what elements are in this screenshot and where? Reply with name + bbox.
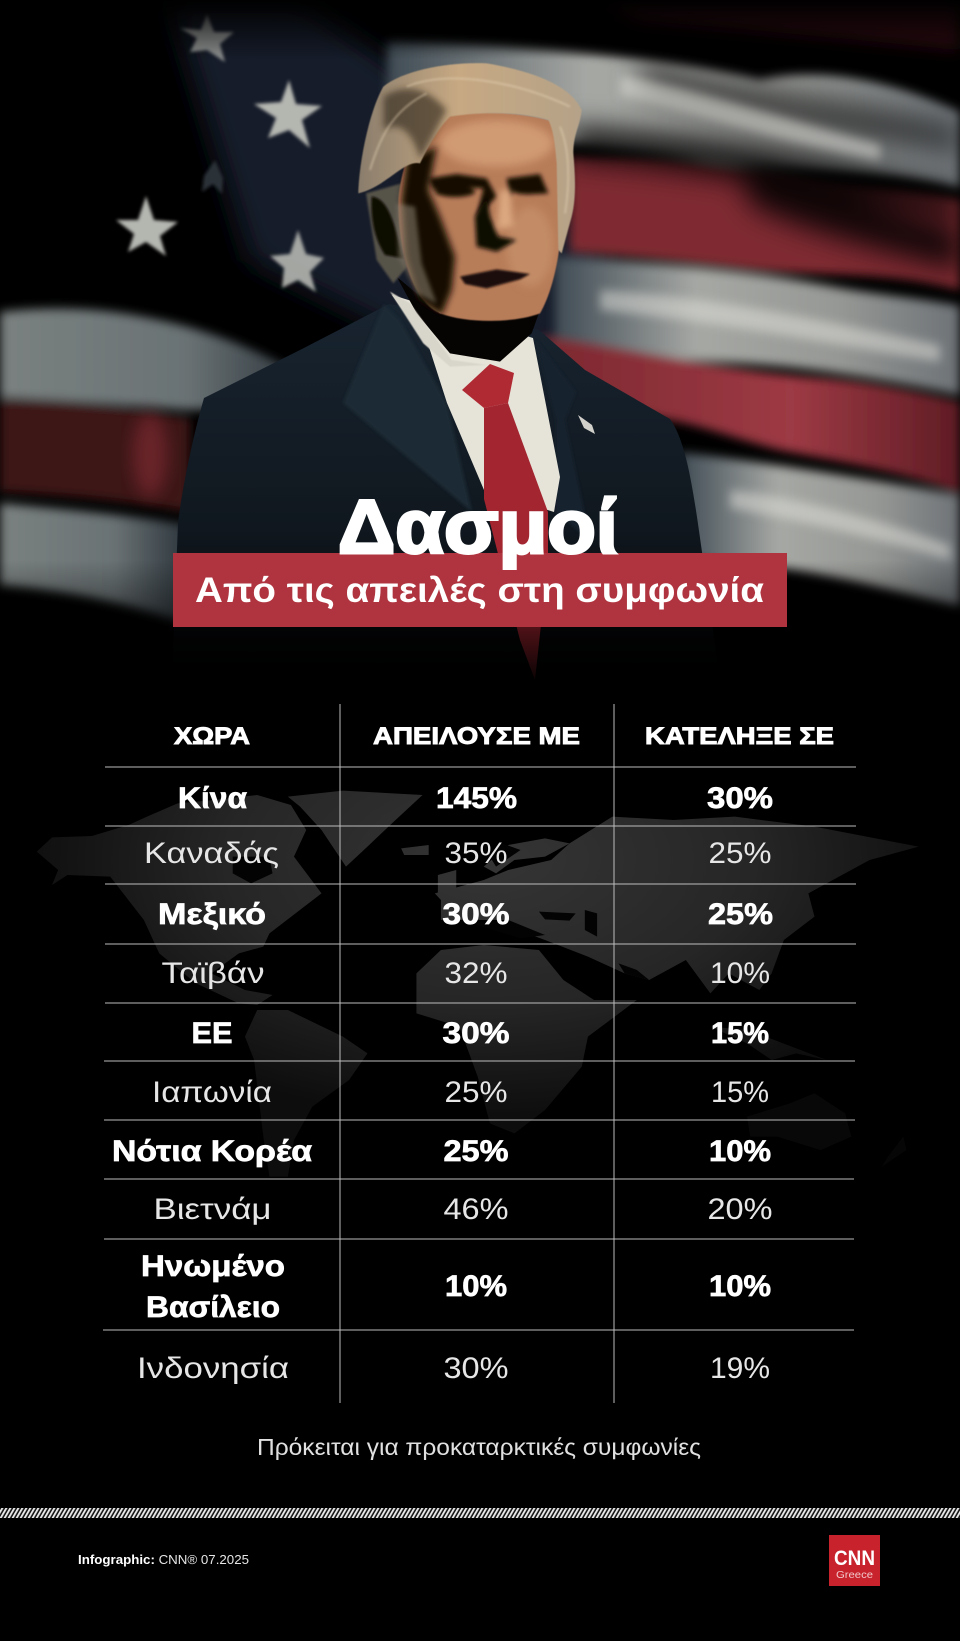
row: Νότια Κορέα [112,1135,771,1168]
forehead light [440,120,553,167]
row: Νότια Κορέα: 25% [444,1135,508,1168]
row: Μεξικό: 30% [442,898,510,931]
row: Ινδονησία: 30% [444,1352,508,1385]
row: Βιετνάμ: 20% [708,1193,772,1226]
shirt [392,295,560,512]
row: Μεξικό: Μεξικό [158,898,266,931]
footnote: Πρόκειται για προκαταρκτικές συμφωνίες [257,1434,701,1460]
banner background [173,553,787,627]
face base [398,113,561,321]
hair sides [366,183,410,283]
indonesia [710,1027,827,1060]
table grid lines [103,704,856,1403]
row: Ηνωμένο Βασίλειο: 10% [709,1270,771,1303]
logo background [829,1535,880,1586]
row: Ηνωμένο Βασίλειο: 10% [445,1270,507,1303]
hero image: flag background [0,0,960,625]
row: Ταϊβάν: Ταϊβάν [162,957,264,990]
row: Ταϊβάν: 32% [444,957,508,990]
neck shadow [397,277,540,362]
inland seas and bays [233,843,649,980]
row: Ινδονησία: 19% [710,1352,770,1385]
hatched divider [0,1508,960,1518]
north america [37,795,322,1005]
row: Κίνα: Κίνα [178,782,248,815]
hair strands [370,79,570,213]
header row: ΑΠΕΙΛΟΥΣΕ ΜΕ [373,723,580,750]
flag canton [170,0,610,370]
top red band [600,0,960,50]
row: Μεξικό [158,898,773,931]
grey side strip [397,203,437,303]
bottom fade of hero image [0,560,960,690]
subtitle text: Από τις απειλές στη συμφωνία [195,571,765,610]
ear shadow [371,197,403,258]
hair [358,63,582,253]
tie [462,364,548,680]
row: Κίνα: 30% [707,782,773,815]
eurasia [435,817,919,993]
nose shadow [475,197,517,252]
row: Ινδονησία: Ινδονησία [137,1352,289,1385]
greenland [288,791,423,867]
flag dark folds right [570,60,960,270]
scandinavia [484,838,570,873]
flag pin [578,415,595,434]
row: Ταϊβάν: 10% [710,957,770,990]
header row: ΧΩΡΑ [174,723,250,750]
row: Ταϊβάν [162,957,770,990]
row: Νότια Κορέα: Νότια Κορέα [112,1135,313,1168]
brows and eye sockets [428,174,548,217]
row: ΕΕ: 15% [711,1017,769,1050]
logo region name: Greece [836,1569,873,1581]
new zealand [882,1137,906,1167]
header row [174,723,834,750]
head [358,63,582,367]
world map background [37,791,919,1177]
row: Ιαπωνία: 25% [444,1076,508,1109]
australia [747,1093,851,1150]
nose highlight [497,190,513,230]
red fold on left stripe [132,413,168,497]
row: Ινδονησία [137,1352,770,1385]
africa [416,945,637,1133]
suit [172,304,720,680]
flag stars [116,14,324,292]
logo wordmark: CNN [834,1547,875,1570]
row: Ηνωμένο Βασίλειο: Βασίλειο [146,1291,280,1324]
subtitle banner [173,553,787,627]
shirt collar left [390,292,487,367]
row: Βιετνάμ: 46% [444,1193,508,1226]
mouth [460,269,530,288]
row: Βιετνάμ [154,1193,772,1226]
row: Κίνα [178,782,773,815]
uk and iceland [401,845,456,895]
title: Δασμοί [338,485,618,570]
row: Κίνα: 145% [436,782,517,815]
row: Βιετνάμ: Βιετνάμ [154,1193,272,1226]
top darkening [0,0,960,60]
south america [245,1010,367,1177]
row: Ηνωμένο Βασίλειο [141,1250,771,1324]
row: Καναδάς: Καναδάς [144,837,279,870]
flag highlight streaks right [600,75,950,560]
row: Ηνωμένο Βασίλειο: Ηνωμένο [141,1250,285,1283]
row: ΕΕ: 30% [442,1017,510,1050]
row: ΕΕ: ΕΕ [192,1017,232,1050]
portrait figure [172,63,720,680]
row: ΕΕ [192,1017,769,1050]
row: Ιαπωνία: Ιαπωνία [152,1076,272,1109]
row: Καναδάς: 35% [444,837,508,870]
hair shadow [383,89,447,160]
credit line: Infographic: CNN® 07.2025 [78,1553,249,1567]
left lapel [343,304,472,512]
row: Ιαπωνία: 15% [711,1076,769,1109]
row: Μεξικό: 25% [708,898,773,931]
flag stripes right [387,42,960,606]
header row: ΚΑΤΕΛΗΞΕ ΣΕ [645,723,834,750]
row: Καναδάς: 25% [708,837,772,870]
row: Καναδάς [144,837,772,870]
row: Ιαπωνία [152,1076,769,1109]
row: Νότια Κορέα: 10% [709,1135,771,1168]
cheek light [507,207,553,287]
table [103,704,856,1403]
flag stripes left [0,309,310,625]
logo: CNN Greece [829,1535,880,1586]
right lapel [536,340,590,540]
face shadow left [402,147,455,315]
